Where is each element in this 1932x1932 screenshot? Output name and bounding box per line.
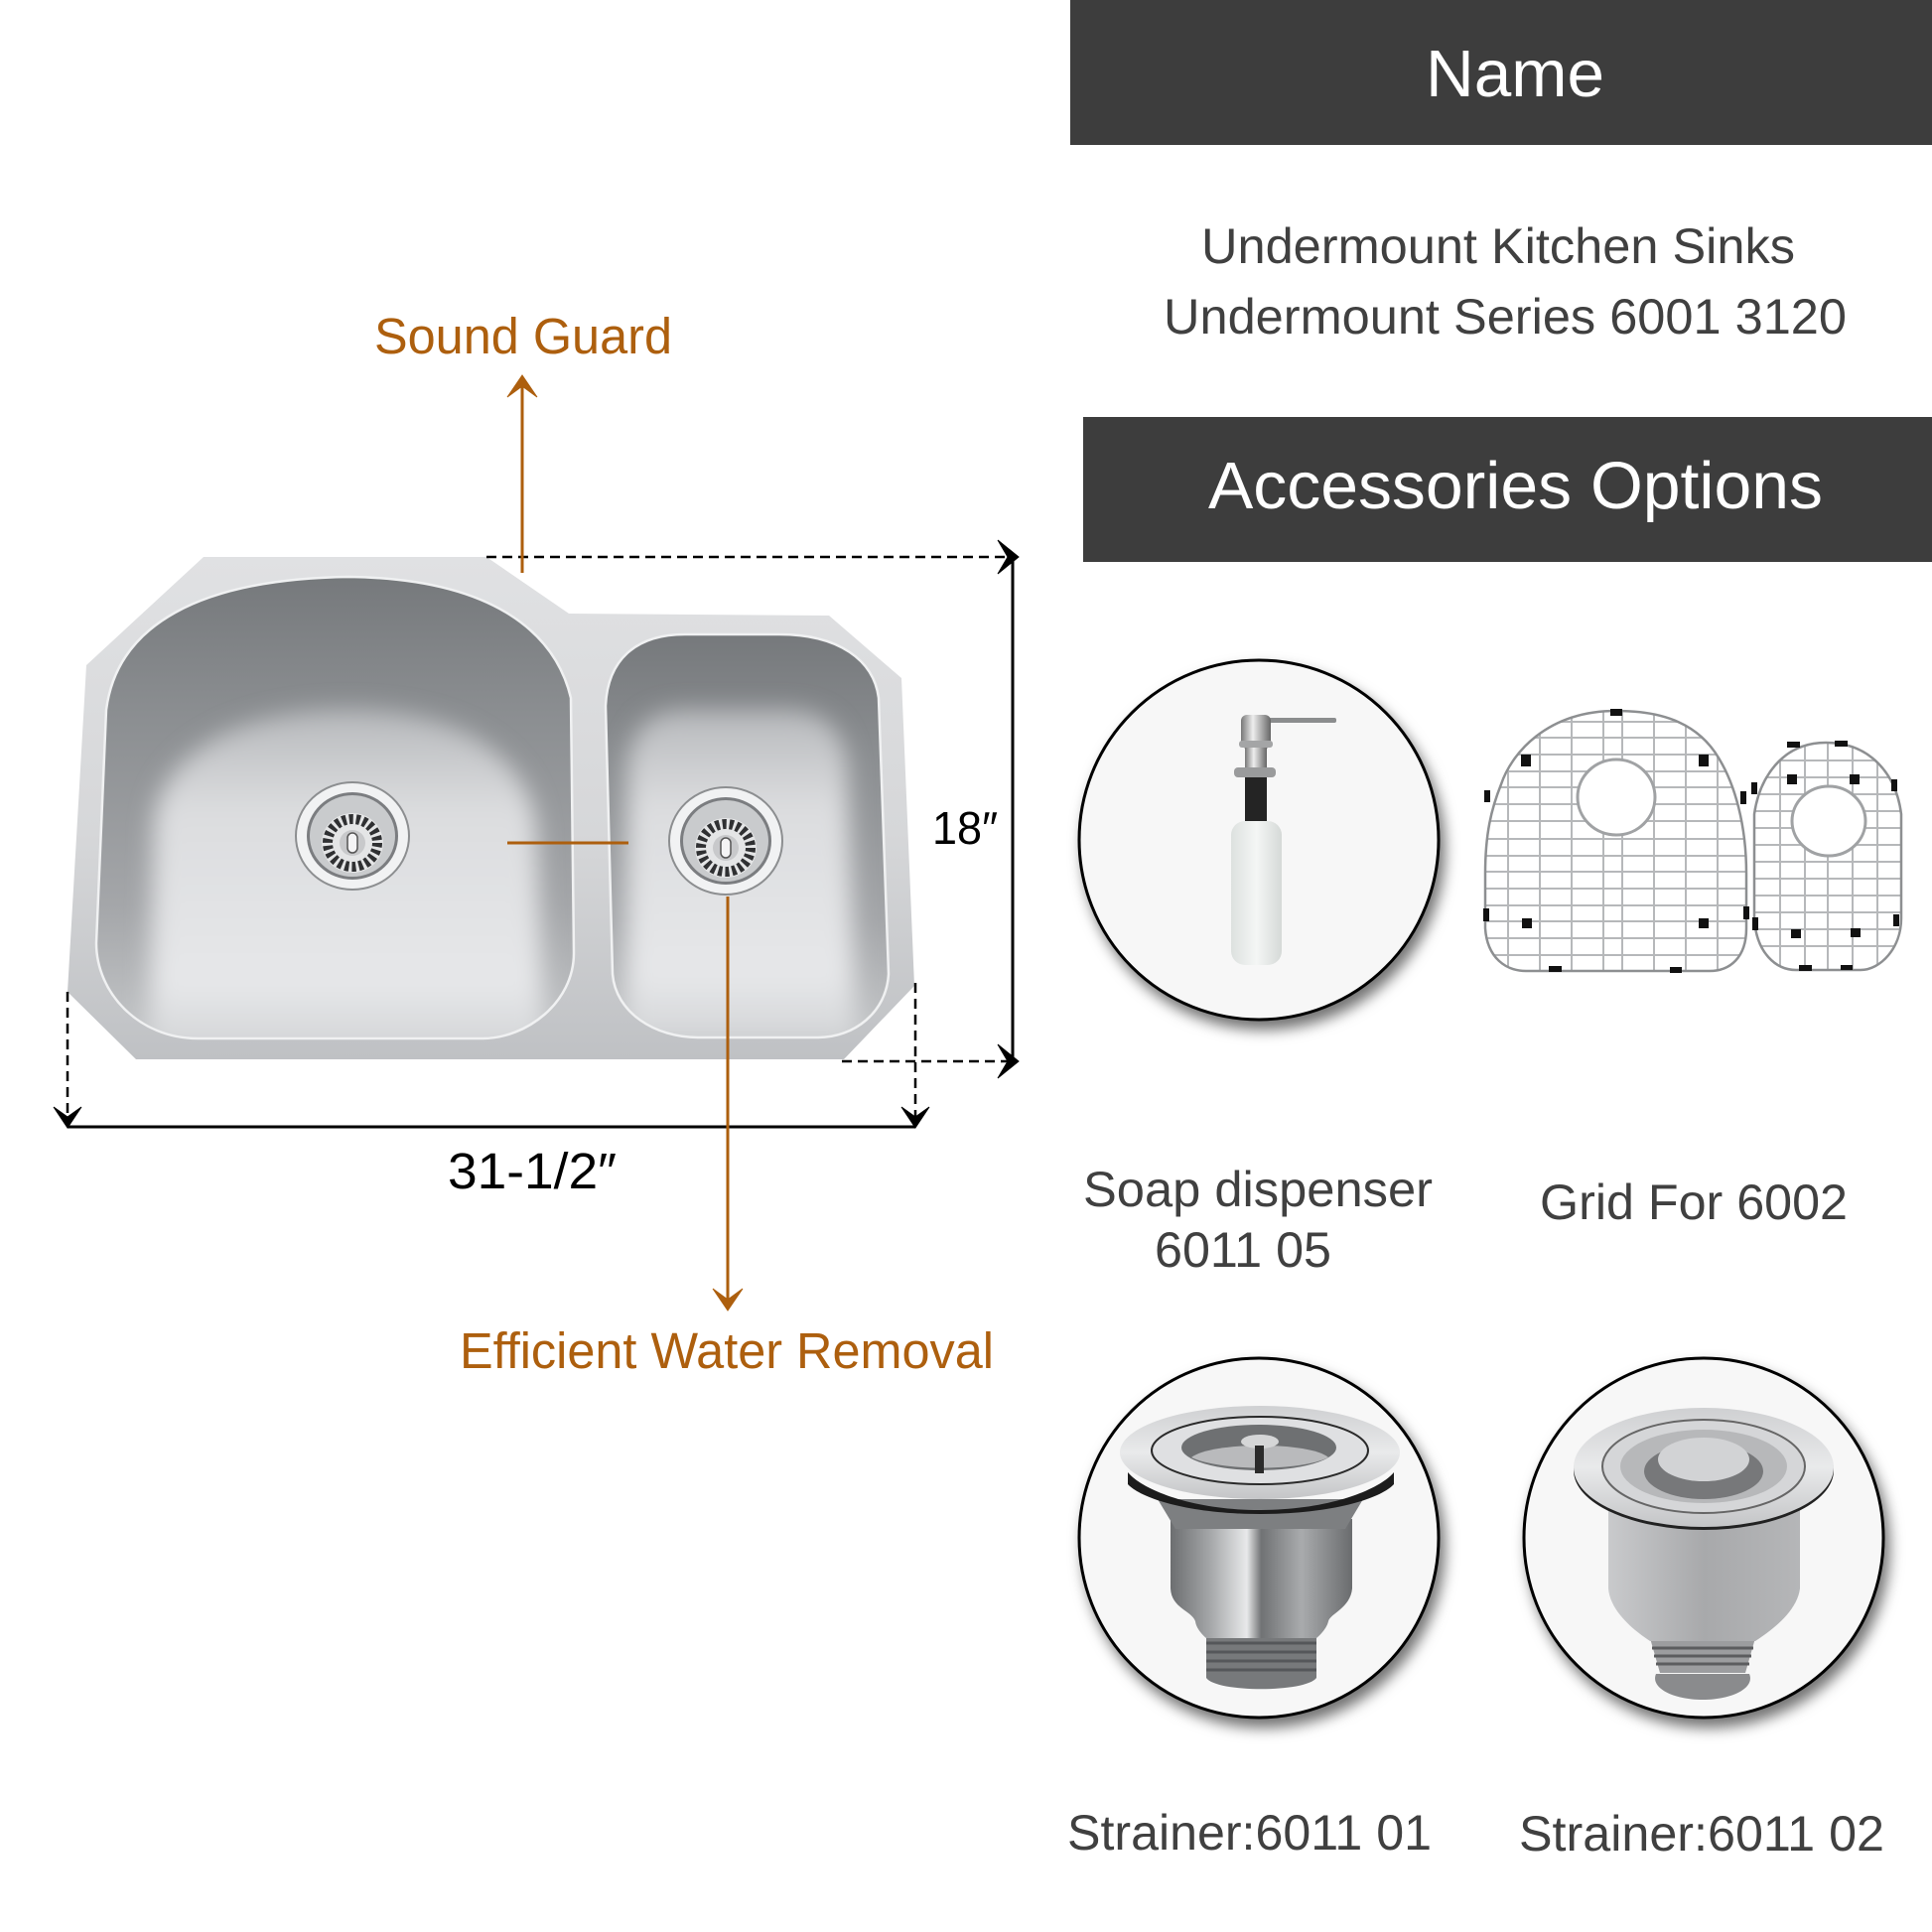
accessory: soap dispenser — [1079, 660, 1439, 1020]
accessory: strainer 01 — [1079, 1358, 1439, 1718]
small grid — [1751, 741, 1901, 971]
sink flange — [68, 557, 914, 1059]
product name: Undermount Series 6001 3120 — [1164, 289, 1847, 345]
header: accessories options: Accessories Options — [1208, 449, 1823, 523]
label: width: 31-1/2″ — [448, 1143, 617, 1199]
product name — [1164, 218, 1847, 345]
accessory: sink grids — [1483, 709, 1901, 973]
label: height: 18″ — [932, 802, 998, 854]
caption: strainer 02: Strainer:6011 02 — [1519, 1806, 1884, 1862]
width dimension — [54, 983, 929, 1128]
large grid — [1483, 709, 1749, 973]
product name: Undermount Kitchen Sinks — [1201, 218, 1795, 274]
caption: strainer 01: Strainer:6011 01 — [1067, 1805, 1432, 1861]
caption: soap dispenser: Soap dispenser — [1083, 1162, 1433, 1217]
large drain — [296, 782, 409, 890]
sink photo — [68, 557, 914, 1059]
small bowl rim — [606, 634, 889, 1037]
accessory: strainer 02 — [1524, 1358, 1883, 1718]
large bowl rim — [96, 577, 574, 1038]
arrow: water removal — [713, 897, 743, 1311]
header: accessories options — [1083, 417, 1932, 562]
caption: soap dispenser — [1083, 1162, 1433, 1278]
small drain — [669, 787, 782, 895]
header: name: Name — [1426, 37, 1604, 111]
arrow: sound guard — [507, 375, 537, 573]
label: sound guard: Sound Guard — [374, 308, 672, 364]
caption: soap dispenser: 6011 05 — [1155, 1222, 1331, 1278]
height dimension — [486, 540, 1019, 1078]
label: efficient water removal: Efficient Water Removal — [460, 1322, 994, 1379]
large bowl — [89, 571, 581, 1052]
header: name — [1070, 0, 1932, 145]
marker: bowl divider — [507, 842, 628, 844]
caption: grid: Grid For 6002 — [1540, 1174, 1848, 1230]
small bowl — [601, 630, 894, 1042]
